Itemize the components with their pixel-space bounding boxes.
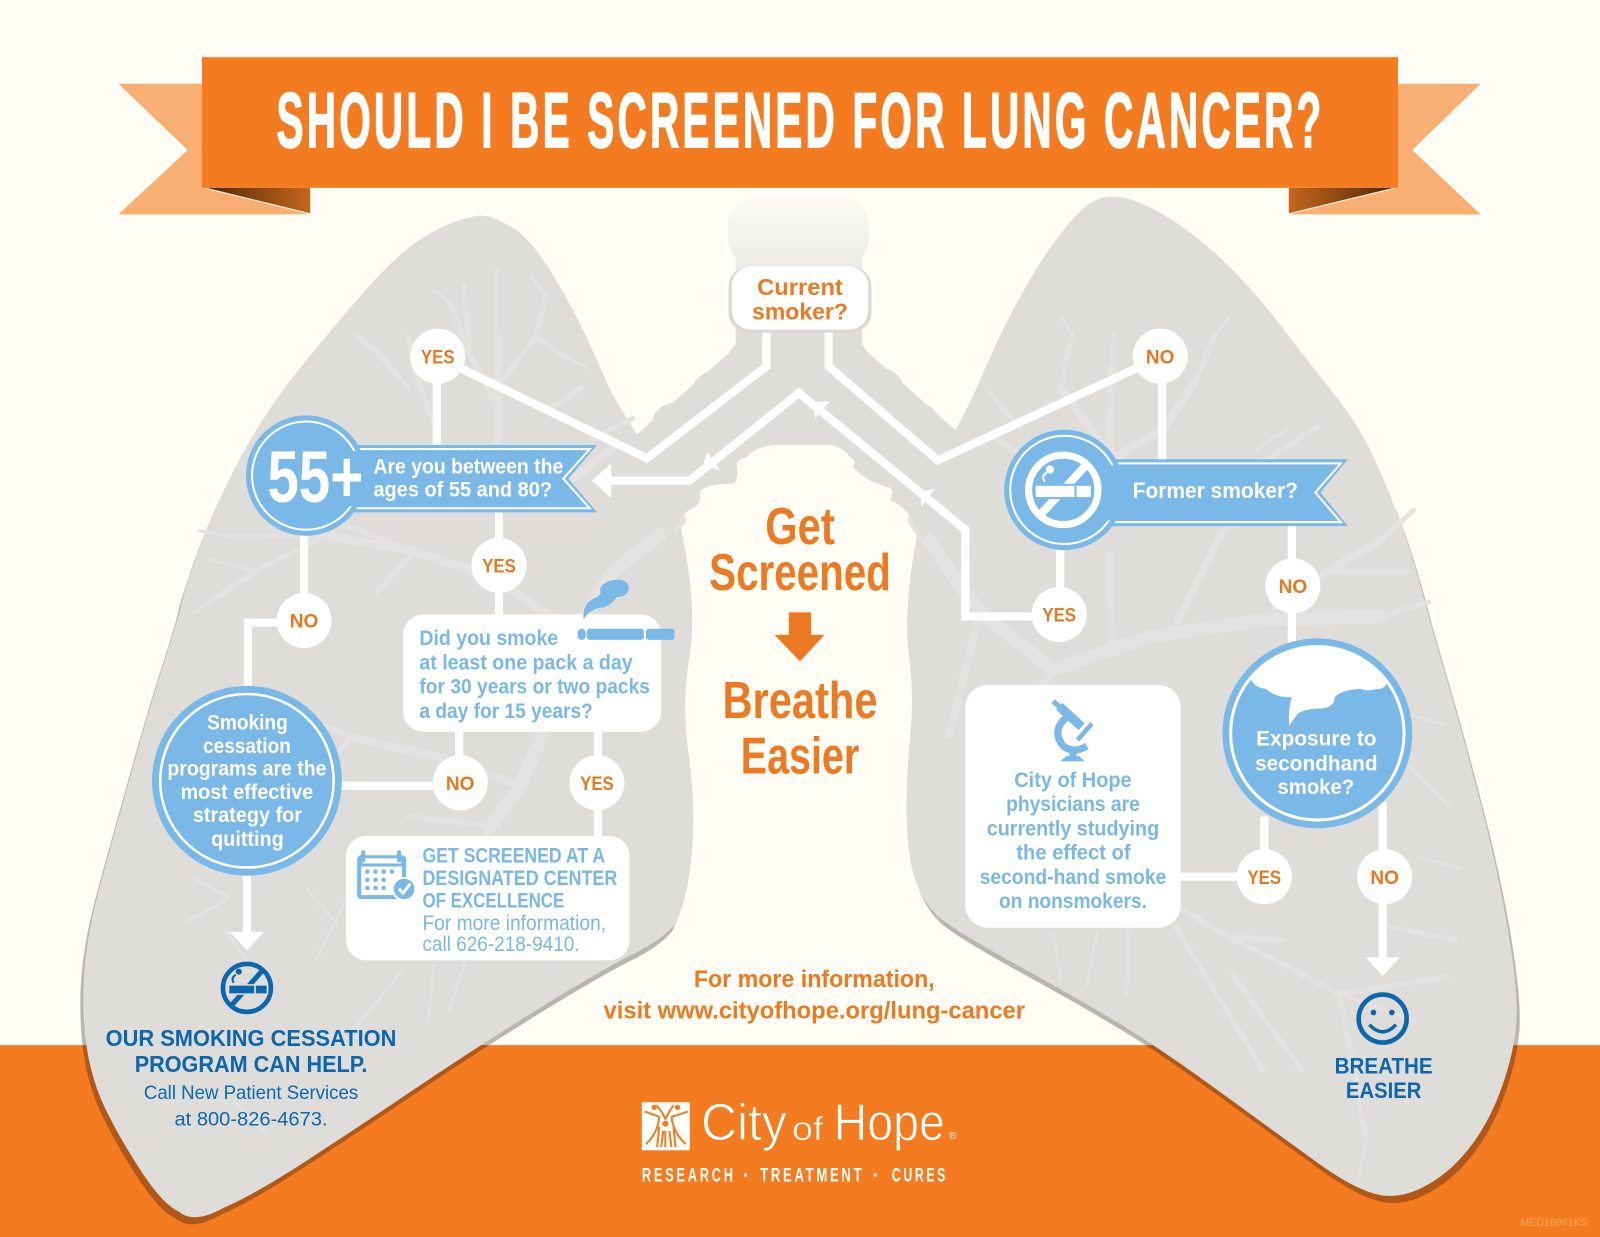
question: pack history: Did you smoke: [419, 626, 558, 650]
icon: no smoking small: [223, 964, 271, 1012]
icon: smoke cloud: [1251, 648, 1387, 726]
question: pack history: a day for 15 years?: [419, 699, 593, 723]
answer bubbles: [277, 329, 1412, 904]
cessation program message: at 800-826-4673.: [174, 1109, 328, 1131]
question: pack history: for 30 years or two packs: [419, 675, 650, 699]
panel: get screened: [346, 836, 630, 960]
more information link: For more information,: [694, 966, 935, 993]
panel: get screened: GET SCREENED AT A: [422, 843, 605, 867]
answer bubbles: YES: [580, 773, 614, 795]
arrow: to breathe easier: [1365, 957, 1400, 976]
center slogan: Screened: [709, 544, 891, 602]
answer bubbles: NO: [1370, 867, 1399, 889]
question: current smoker: [729, 266, 871, 333]
panel: get screened: For more information,: [422, 911, 606, 935]
logo: city of hope: City: [701, 1094, 787, 1152]
answer bubbles: NO: [446, 773, 474, 795]
panel: smoking cessation circle: quitting: [211, 827, 284, 851]
logo: city of hope: Hope: [834, 1094, 945, 1152]
icon: smiley: [1359, 995, 1407, 1043]
cessation program message: PROGRAM CAN HELP.: [135, 1051, 367, 1077]
small flow arrowheads: [703, 401, 935, 507]
center slogan: [709, 498, 891, 786]
icon: calendar: [357, 850, 415, 900]
logo: city of hope: RESEARCH: [642, 1164, 736, 1186]
panel: city of hope research: physicians are: [1006, 792, 1140, 816]
answer bubbles: YES: [1042, 605, 1076, 627]
panel: city of hope research: currently studying: [987, 816, 1159, 840]
question: current smoker: smoker?: [752, 298, 848, 324]
icon: microscope: [1053, 701, 1092, 761]
arrow: into age question: [592, 463, 611, 498]
logo: city of hope: CURES: [892, 1164, 948, 1186]
answer bubbles: NO: [1146, 346, 1174, 368]
panel: smoking cessation circle: most effective: [181, 780, 313, 804]
question: secondhand smoke exposure: secondhand: [1255, 751, 1378, 775]
panel: get screened: call 626-218-9410.: [422, 932, 580, 956]
question: pack history: at least one pack a day: [419, 651, 633, 675]
panel: smoking cessation circle: programs are the: [167, 757, 327, 781]
logo: city of hope: of: [792, 1111, 824, 1148]
panel: city of hope research: [965, 685, 1181, 928]
flow lines: [247, 327, 1383, 959]
panel: get screened: OF EXCELLENCE: [422, 888, 564, 912]
title ribbon: [118, 57, 1481, 214]
panel: smoking cessation circle: strategy for: [193, 803, 303, 827]
panel: smoking cessation circle: cessation: [203, 734, 291, 758]
cessation program message: [106, 1025, 396, 1131]
badge: former smoker question: Former smoker?: [1133, 478, 1298, 503]
panel: city of hope research: on nonsmokers.: [999, 889, 1147, 913]
cessation program message: OUR SMOKING CESSATION: [106, 1025, 396, 1051]
answer bubbles: YES: [1247, 867, 1281, 889]
logo: city of hope: [642, 1094, 957, 1186]
breathe easier outcome: EASIER: [1346, 1078, 1421, 1103]
more information link: [604, 966, 1025, 1025]
badge: former smoker question: [1004, 430, 1348, 550]
logo: city of hope: ®: [949, 1131, 957, 1142]
center slogan: Easier: [741, 728, 859, 786]
answer bubbles: NO: [1279, 576, 1307, 598]
panel: smoking cessation circle: Smoking: [207, 711, 288, 735]
lungs illustration: [80, 197, 1520, 1224]
badge: 55+ age question: [246, 415, 597, 536]
job code: MED16961KS: [1520, 1217, 1588, 1229]
breathe easier outcome: BREATHE: [1335, 1054, 1433, 1079]
answer bubbles: YES: [421, 346, 455, 368]
answer bubbles: YES: [482, 556, 516, 578]
question: secondhand smoke exposure: Exposure to: [1256, 727, 1377, 751]
icon: no smoking: [1029, 455, 1098, 525]
center slogan: Get: [765, 498, 835, 556]
arrow: to cessation program: [230, 932, 264, 950]
logo: city of hope: ·: [743, 1164, 749, 1186]
panel: city of hope research: the effect of: [1016, 840, 1131, 864]
breathe easier outcome: [1335, 1054, 1433, 1103]
panel: get screened: DESIGNATED CENTER: [422, 866, 618, 890]
panel: city of hope research: second-hand smoke: [980, 865, 1166, 889]
logo: city of hope: TREATMENT: [760, 1164, 864, 1186]
footer band: [0, 1045, 1600, 1237]
badge: 55+ age question: 55+: [267, 435, 363, 518]
answer bubbles: NO: [290, 611, 318, 633]
center slogan: Breathe: [722, 672, 878, 730]
question: secondhand smoke exposure: smoke?: [1278, 775, 1354, 799]
more information link: visit www.cityofhope.org/lung-cancer: [604, 998, 1025, 1025]
icon: cigarette with smoke: [578, 580, 674, 640]
badge: 55+ age question: ages of 55 and 80?: [373, 478, 552, 502]
cessation program message: Call New Patient Services: [144, 1082, 358, 1104]
question: pack history: [403, 614, 661, 732]
arrow: down: [774, 612, 824, 661]
question: current smoker: Current: [757, 274, 843, 300]
question: secondhand smoke exposure: [1222, 638, 1412, 828]
logo: city of hope: ·: [872, 1164, 879, 1186]
panel: smoking cessation circle: [152, 686, 342, 876]
badge: 55+ age question: Are you between the: [373, 455, 563, 479]
panel: city of hope research: City of Hope: [1014, 768, 1132, 792]
